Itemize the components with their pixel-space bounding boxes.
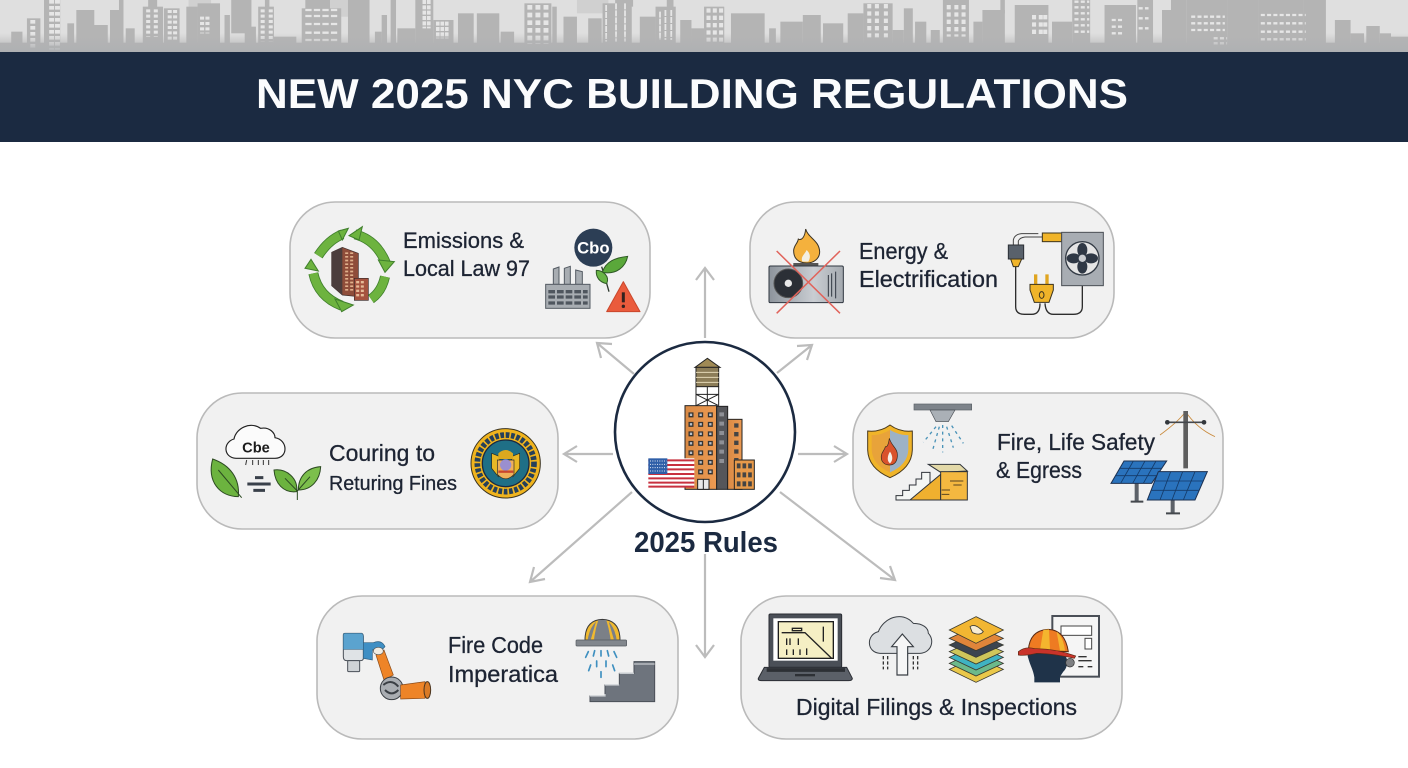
- arrows from hub: [530, 268, 895, 657]
- icon: cloud upload: [869, 617, 932, 675]
- central hub: 2025 rules: [615, 342, 795, 559]
- icon: pipe and valve: [343, 633, 431, 700]
- heading: Local Law 97: [403, 256, 530, 281]
- heading: Electrification: [859, 266, 998, 292]
- heading: & Egress: [996, 457, 1082, 483]
- icon: heat pump and plug: [1008, 232, 1103, 314]
- panel: emissions and local law 97: [290, 202, 650, 338]
- icon: sprinkler and stairs: [576, 619, 655, 702]
- icon: cloud and leaves: [211, 425, 321, 500]
- title: NEW 2025 NYC BUILDING REGULATIONS: [256, 70, 1128, 117]
- icon: crossed-out gas unit: [769, 229, 843, 313]
- heading: Couring to: [329, 440, 435, 466]
- heading: [448, 632, 558, 687]
- heading: Fire Code: [448, 632, 543, 658]
- heading: Energy &: [859, 238, 948, 264]
- heading: [996, 429, 1155, 483]
- panel: energy and electrification: [750, 202, 1114, 338]
- heading: [329, 440, 457, 495]
- panel: fire, life safety and egress: [853, 393, 1223, 529]
- title banner: [0, 52, 1408, 142]
- icon: laptop with plans: [758, 614, 852, 681]
- heading: [403, 228, 530, 281]
- heading: Emissions &: [403, 228, 524, 253]
- icon: carbon factory and warning: Cbo: [577, 239, 610, 258]
- icon: cloud and leaves: Cbe: [242, 440, 270, 456]
- heading: Fire, Life Safety: [997, 429, 1155, 455]
- heading: Digital Filings & Inspections: [796, 694, 1077, 720]
- heading: Returing Fines: [329, 473, 457, 495]
- hub label: 2025 Rules: [634, 527, 778, 559]
- icon: inspector with document: [1018, 616, 1099, 682]
- icon: shield, sprinkler and stairs: [868, 404, 972, 500]
- icon: carbon factory and warning: [546, 229, 640, 312]
- heading: [859, 238, 998, 292]
- icon: recycling arrows and building: [305, 227, 394, 312]
- heading: Imperatica: [448, 661, 558, 687]
- icon: utility pole and solar panels: [1111, 411, 1215, 513]
- icon: official seal: [471, 429, 540, 498]
- icon: stacked layers: [949, 617, 1003, 682]
- skyline: [0, 0, 1408, 52]
- icon: NYC building with water tower and flag: [648, 358, 754, 489]
- panel: fire code imperatica: [317, 596, 678, 739]
- panel: digital filings and inspections: [741, 596, 1122, 739]
- panel: couring to returing fines: [197, 393, 558, 529]
